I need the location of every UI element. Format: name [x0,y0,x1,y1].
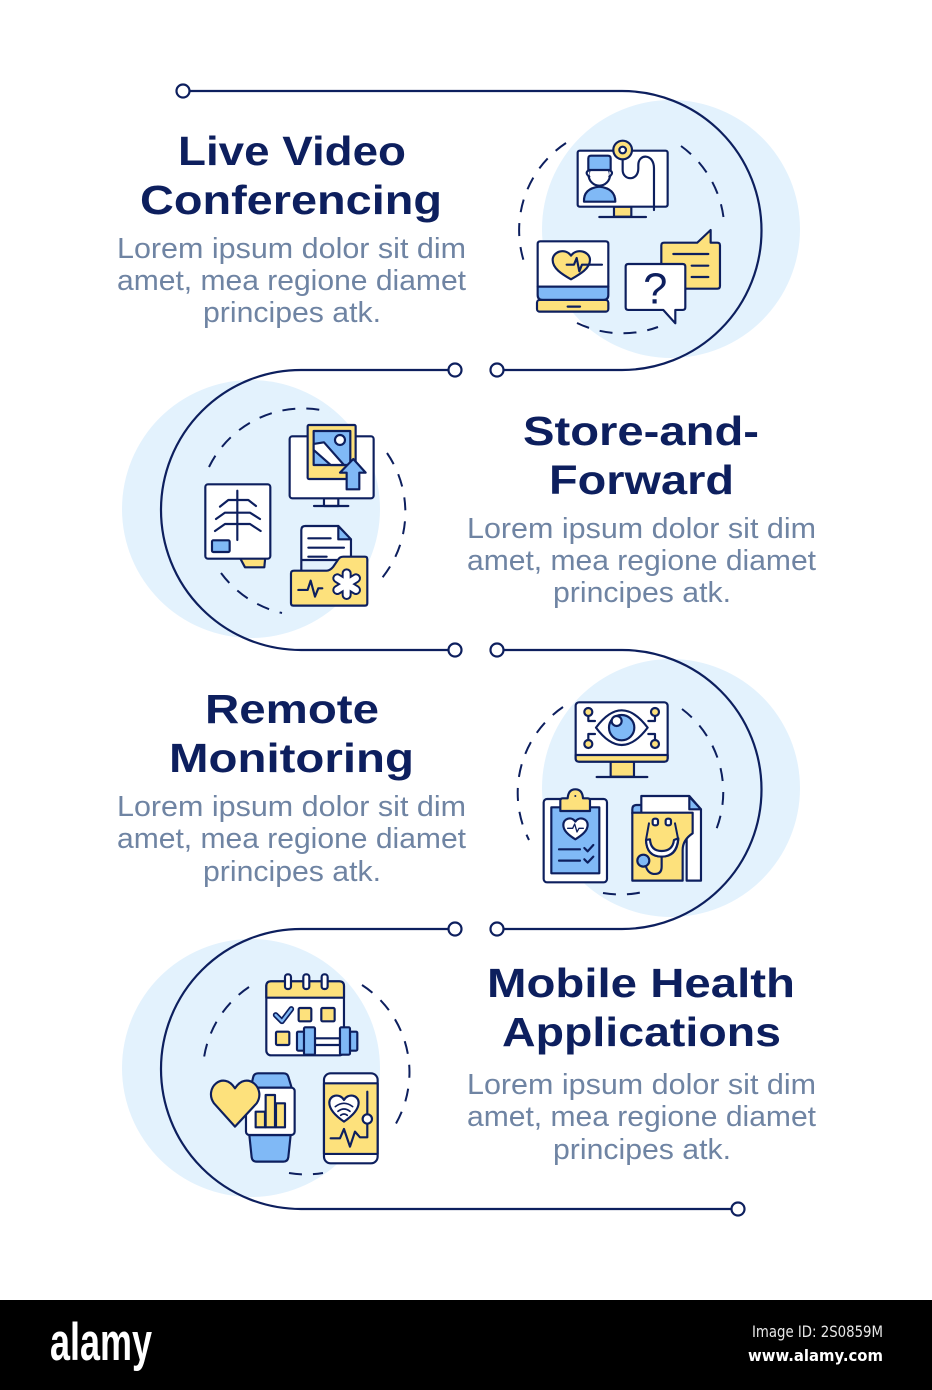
heading: remote monitoring: Monitoring [169,735,414,781]
background circles [122,100,800,1197]
footer bar: stock image credit [0,1300,932,1390]
icon: monitor with image upload [290,425,374,506]
body text: remote monitoring: amet, mea regione diamet [117,823,466,855]
website: www.alamy.com [748,1346,883,1365]
body text: remote monitoring: Lorem ipsum dolor sit dim [117,791,466,823]
connecting timeline line [161,84,762,1216]
body text: mobile health applications: Lorem ipsum dolor sit dim [467,1069,816,1101]
icon: monitor with eye scan [576,702,668,777]
image id: Image ID: 2S0859M [752,1322,883,1341]
dashed ring: remote monitoring [518,707,723,894]
body text: live video conferencing: amet, mea regione diamet [117,265,466,297]
icon: medical folder with document [291,526,367,606]
panel: mobile health applications [203,960,816,1174]
icon: doctor on video monitor [578,141,668,217]
body text: store-and-forward [467,513,816,609]
body text: store-and-forward: principes atk. [553,577,731,609]
heading: mobile health applications: Mobile Health [487,960,795,1006]
icon: calendar with dumbbell [266,974,357,1055]
icon: clipboard with heart checklist [544,789,607,882]
body text: live video conferencing: principes atk. [203,297,381,329]
heading: mobile health applications: Applications [502,1009,781,1055]
icon: chat bubbles with question: ? [643,265,667,313]
body text: remote monitoring: principes atk. [203,856,381,888]
icon: chat bubbles with question [626,230,720,323]
panel: remote monitoring [117,686,723,894]
icon: x-ray film [205,484,270,567]
heading: store-and-forward [523,408,759,503]
panel: live video conferencing [117,128,724,333]
icon: smartwatch with heart [211,1073,295,1162]
heading: live video conferencing: Live Video [178,128,406,174]
heading: live video conferencing: Conferencing [140,177,442,223]
icon: smartphone with wifi heart [324,1073,378,1163]
panel: store-and-forward [205,408,816,613]
dashed ring: mobile health applications [203,985,409,1174]
body text: mobile health applications: amet, mea regione diamet [467,1101,816,1133]
heading: remote monitoring [169,686,414,781]
heading: store-and-forward: Store-and- [523,408,759,454]
icon: folder with stethoscope [632,796,701,881]
body text: live video conferencing [117,233,466,329]
heading: mobile health applications [487,960,795,1055]
body text: store-and-forward: Lorem ipsum dolor sit dim [467,513,816,545]
heading: remote monitoring: Remote [205,686,379,732]
body text: live video conferencing: Lorem ipsum dolor sit dim [117,233,466,265]
body text: mobile health applications [467,1069,816,1166]
body text: store-and-forward: amet, mea regione diamet [467,545,816,577]
icon: laptop with heartbeat [537,241,608,312]
body text: remote monitoring [117,791,466,888]
dashed ring: store-and-forward [209,408,405,613]
heading: live video conferencing [140,128,442,223]
body text: mobile health applications: principes atk. [553,1134,731,1166]
dashed ring: live video conferencing [519,143,724,333]
heading: store-and-forward: Forward [549,457,734,503]
logo text: alamy [50,1313,152,1372]
